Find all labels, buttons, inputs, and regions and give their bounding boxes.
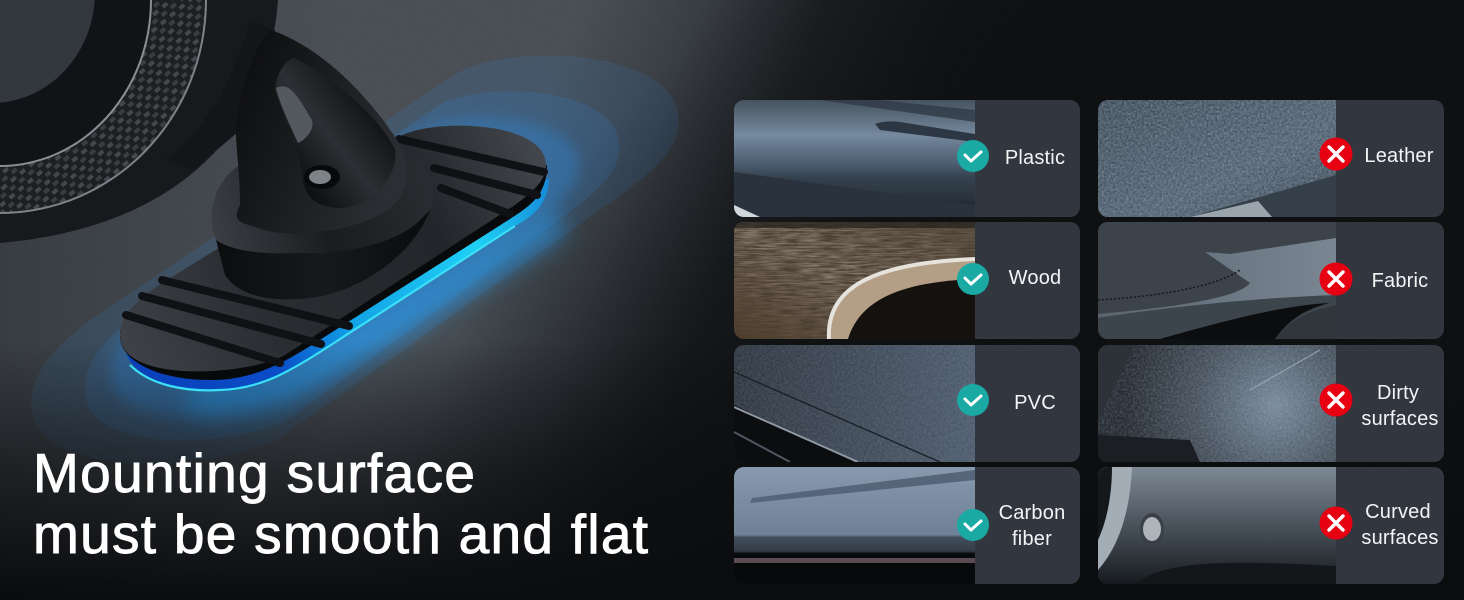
icon: cross	[1320, 262, 1352, 296]
collar top	[212, 140, 434, 253]
panel: dirty surfaces: Dirty	[1377, 382, 1419, 404]
screw	[304, 165, 340, 189]
panel: fabric	[1098, 222, 1444, 339]
panel: plastic	[734, 100, 1080, 217]
icon: cross	[1320, 138, 1352, 170]
phone mount ring with carbon fibre band	[0, 0, 278, 243]
mount arm	[236, 30, 407, 234]
heading: must be smooth and flat	[33, 503, 648, 565]
icon: cross	[1320, 384, 1352, 416]
base cylinder	[216, 195, 432, 299]
icon: check	[957, 509, 989, 541]
panel: carbon fiber: Carbon	[999, 502, 1065, 524]
panel: curved surfaces: Curved	[1365, 501, 1431, 523]
panel: PVC: PVC	[1014, 392, 1056, 414]
see-through window	[276, 86, 313, 143]
panel: leather	[1098, 100, 1444, 217]
panel: PVC	[734, 345, 1080, 462]
panel: curved surfaces: surfaces	[1361, 527, 1439, 549]
heading: Mounting surface	[33, 442, 475, 504]
icon: cross	[1320, 506, 1352, 540]
arm opening	[275, 58, 395, 208]
pad ribs	[126, 139, 544, 363]
panel: wood	[734, 222, 1080, 339]
icon: check	[957, 140, 989, 172]
panel: curved surfaces	[1098, 467, 1444, 584]
icon: check	[957, 263, 989, 295]
panel: leather: Leather	[1364, 145, 1434, 167]
pad dark side band	[120, 165, 547, 380]
panel: wood: Wood	[1009, 267, 1061, 289]
joint block behind ring	[165, 20, 275, 170]
icon: check	[957, 384, 989, 416]
pad edge glow strip	[126, 178, 549, 391]
panel: plastic: Plastic	[1005, 147, 1065, 169]
panel: carbon fiber: fiber	[1012, 528, 1052, 550]
blue ripple halos around the pad	[31, 56, 679, 464]
panel: fabric: Fabric	[1372, 270, 1428, 292]
panel: dirty surfaces	[1098, 345, 1444, 462]
heading	[33, 442, 648, 565]
panel: dirty surfaces: surfaces	[1361, 408, 1439, 430]
panel: carbon fiber	[734, 467, 1080, 584]
adhesive pad top surface	[120, 126, 546, 371]
